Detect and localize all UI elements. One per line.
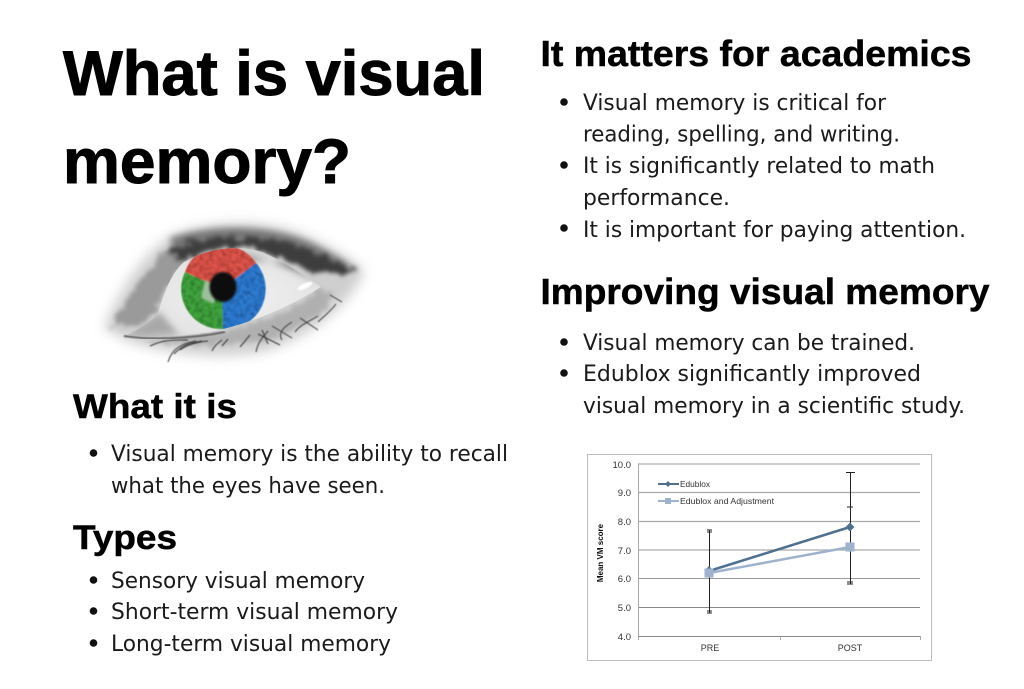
heading: improving: Improving visual memory <box>540 271 990 312</box>
legend <box>658 479 775 506</box>
text block: what it is: Visual memory is the ability to recall <box>111 441 508 467</box>
title: What is visual <box>63 39 485 109</box>
series: Edublox <box>704 522 854 575</box>
legend: Edublox <box>680 479 711 489</box>
y axis labels <box>612 460 631 643</box>
y axis labels: 8.0 <box>618 517 631 528</box>
list: improving: Edublox significantly improved <box>583 361 921 387</box>
eyelids and lashes <box>104 224 364 362</box>
icon: eye with red, green and blue iris <box>104 224 364 362</box>
list: academics: Visual memory is critical for <box>583 90 887 116</box>
heading: types: Types <box>73 519 177 557</box>
list: academics: It is significantly related to math <box>583 153 935 179</box>
list: types <box>90 568 398 657</box>
legend: Edublox and Adjustment <box>680 496 775 506</box>
iris wedges <box>181 245 266 329</box>
series: Edublox and Adjustment <box>704 542 854 578</box>
heading: what it is: What it is <box>73 388 237 426</box>
y axis labels: 10.0 <box>612 460 631 471</box>
x axis labels: PRE <box>701 643 719 653</box>
x axis labels <box>701 643 863 653</box>
text block: what it is: what the eyes have seen. <box>111 473 385 499</box>
line chart: mean VM score pre and post <box>588 454 932 660</box>
list: improving: visual memory in a scientific study. <box>583 393 965 419</box>
x axis labels: POST <box>838 643 863 653</box>
text block: what it is <box>90 441 508 499</box>
y axis labels: 9.0 <box>618 488 631 499</box>
y axis labels: 6.0 <box>618 574 631 585</box>
list: academics <box>560 90 966 243</box>
title: memory? <box>63 127 351 197</box>
list: types: Sensory visual memory <box>111 568 365 594</box>
title <box>63 39 485 197</box>
list: improving <box>560 330 965 419</box>
list: academics: It is important for paying attention. <box>583 217 966 243</box>
list: academics: reading, spelling, and writing. <box>583 122 900 148</box>
heading: academics: It matters for academics <box>540 33 972 74</box>
list: types: Short-term visual memory <box>111 599 398 625</box>
y axis title: Mean VM score <box>596 523 605 582</box>
error bars <box>707 472 855 613</box>
y axis labels: 7.0 <box>618 546 631 557</box>
list: academics: performance. <box>583 185 730 211</box>
list: types: Long-term visual memory <box>111 631 391 657</box>
y axis labels: 5.0 <box>618 603 631 614</box>
eyeball <box>127 248 321 336</box>
y axis labels: 4.0 <box>618 632 631 643</box>
list: improving: Visual memory can be trained. <box>583 330 915 356</box>
